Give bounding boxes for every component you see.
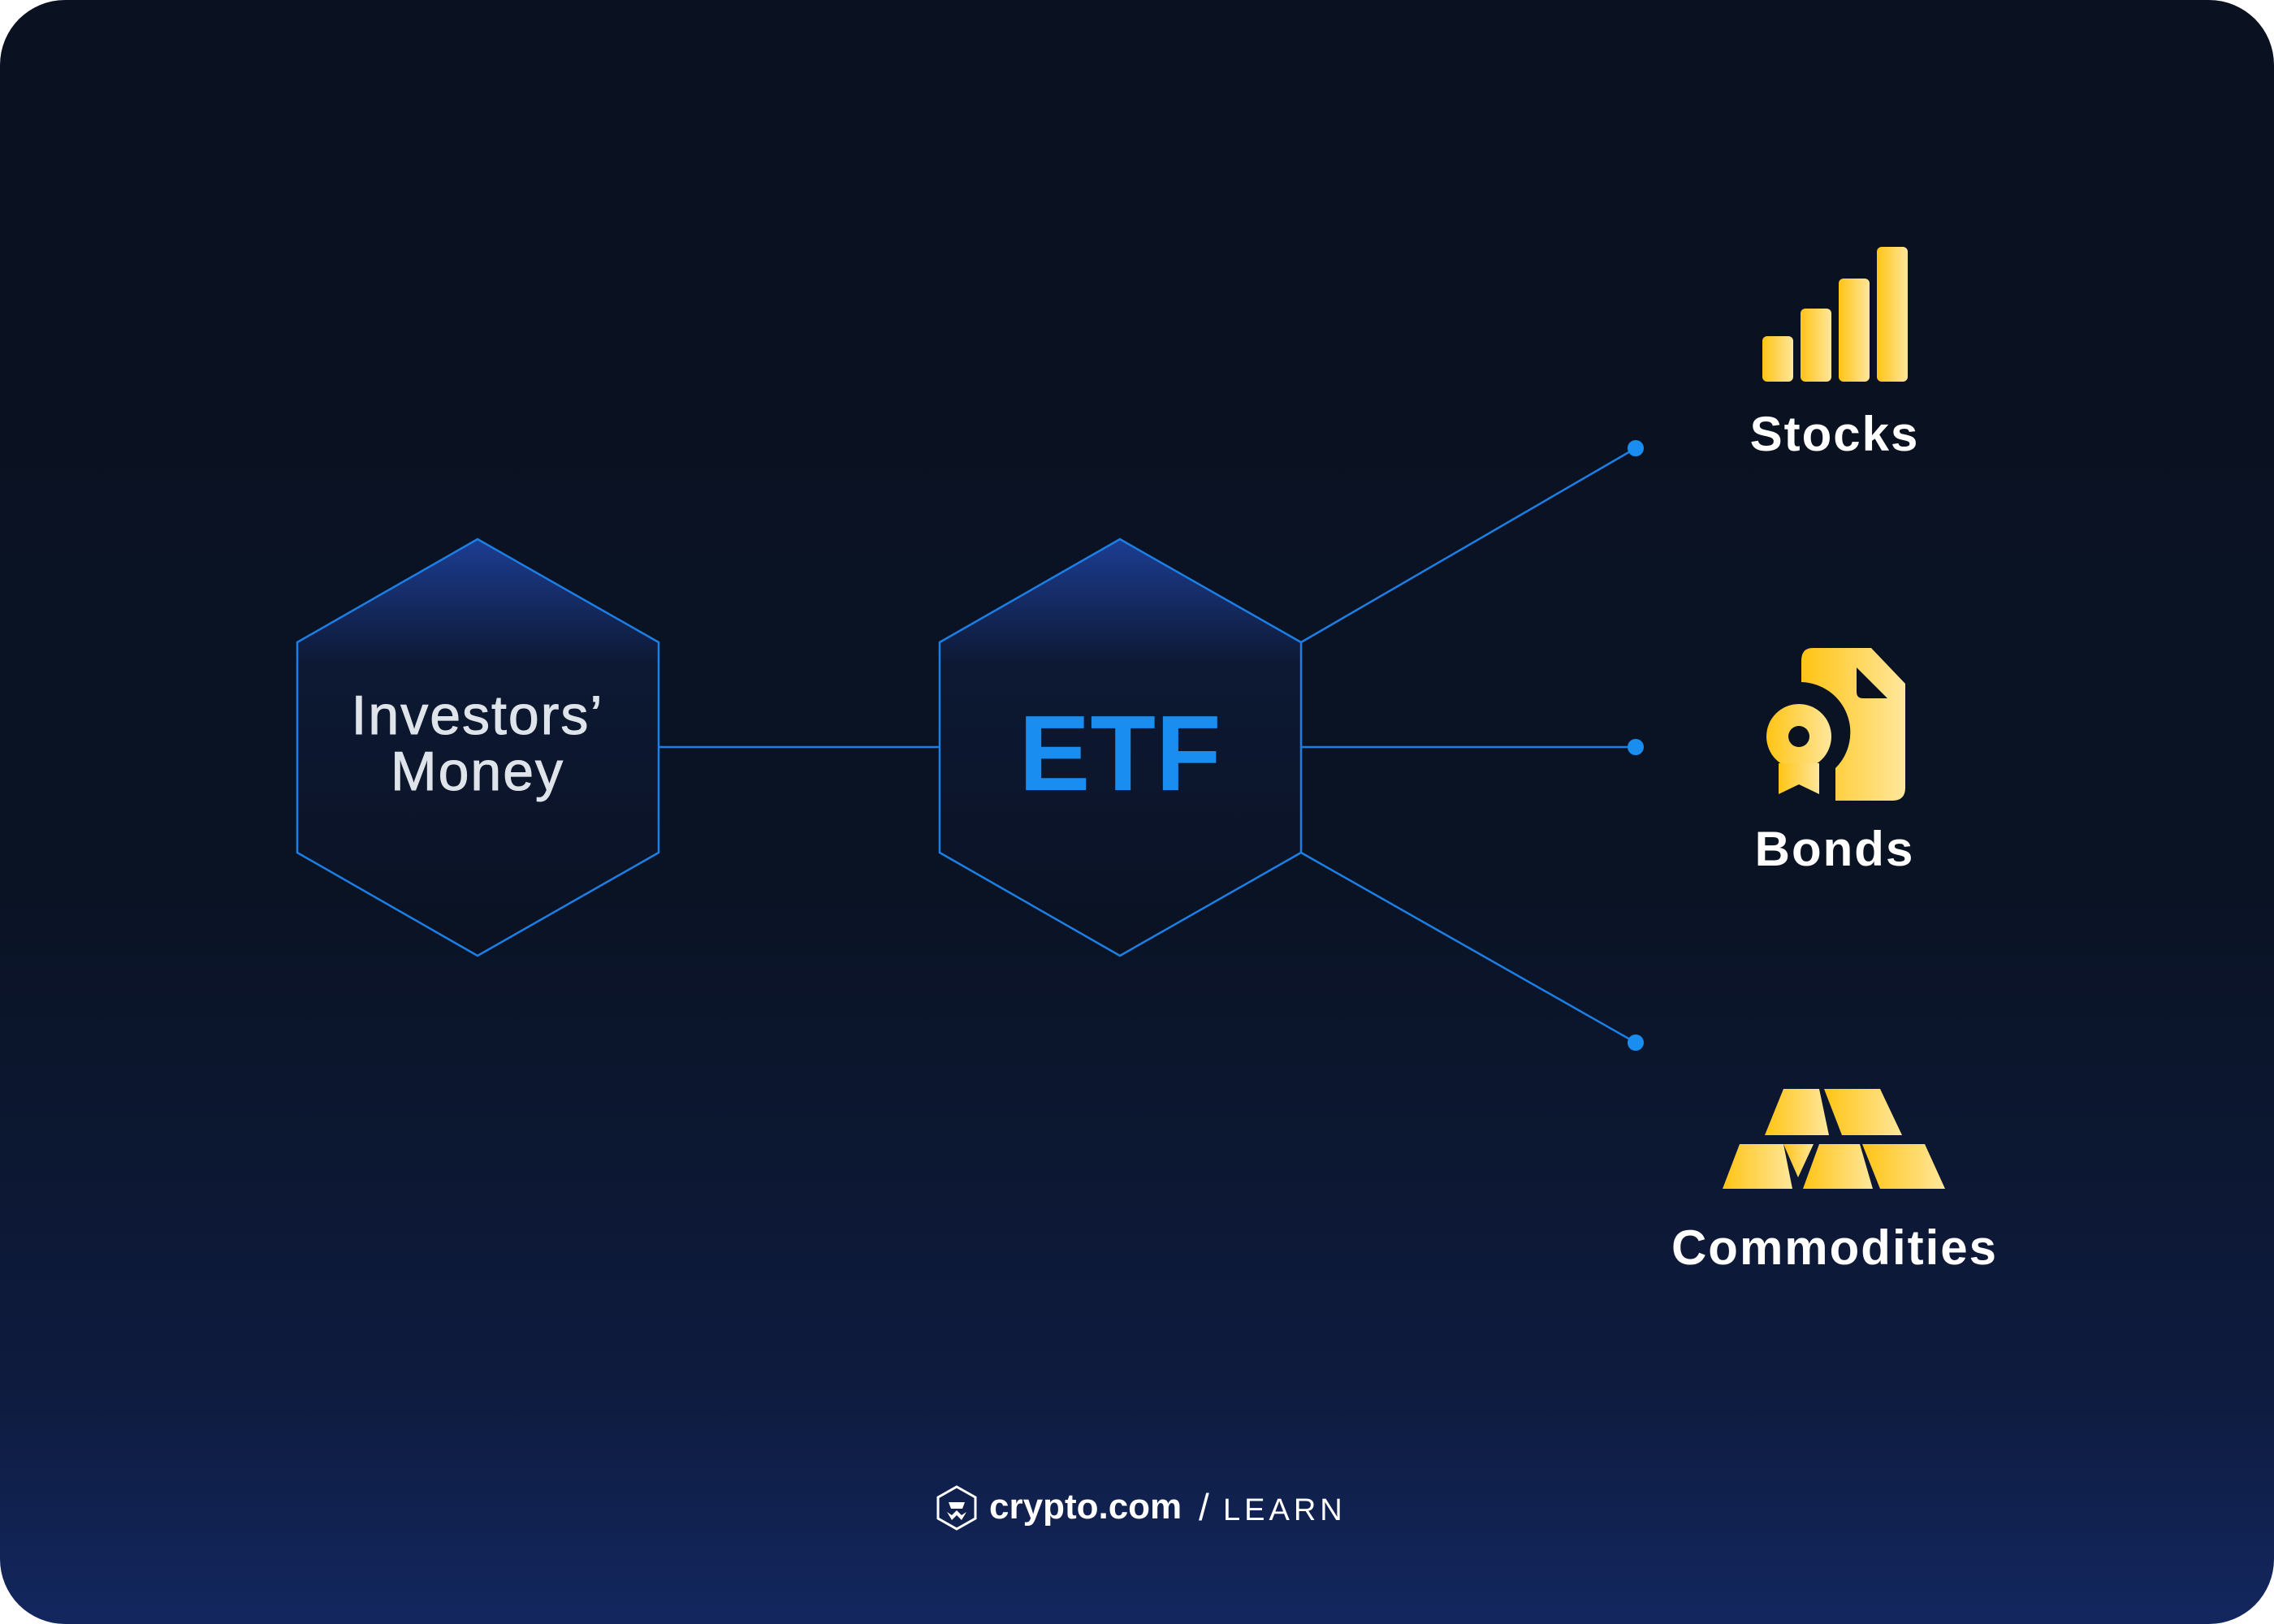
hexagon: ETF — [940, 539, 1301, 956]
icon: bonds certificate — [1766, 648, 1905, 801]
label: bonds: Bonds — [1755, 822, 1914, 876]
connectors: ETF to assets — [1301, 440, 1644, 1051]
label: commodities: Commodities — [1671, 1220, 1998, 1275]
hexagon: ETF: ETF — [1018, 693, 1221, 813]
hexagon: investors' money — [297, 539, 659, 956]
hexagon: investors' money: Money — [391, 741, 564, 802]
connector: money to ETF — [659, 746, 940, 748]
footer logo: crypto.com — [989, 1487, 1182, 1527]
footer logo — [938, 1486, 1347, 1529]
icon: commodities gold bars — [1723, 1089, 1945, 1189]
footer logo: / — [1199, 1486, 1209, 1528]
label: stocks: Stocks — [1750, 407, 1919, 461]
hexagon: investors' money: Investors’ — [351, 685, 604, 746]
icon: stocks bars — [1762, 247, 1908, 382]
footer logo: LEARN — [1223, 1493, 1347, 1527]
